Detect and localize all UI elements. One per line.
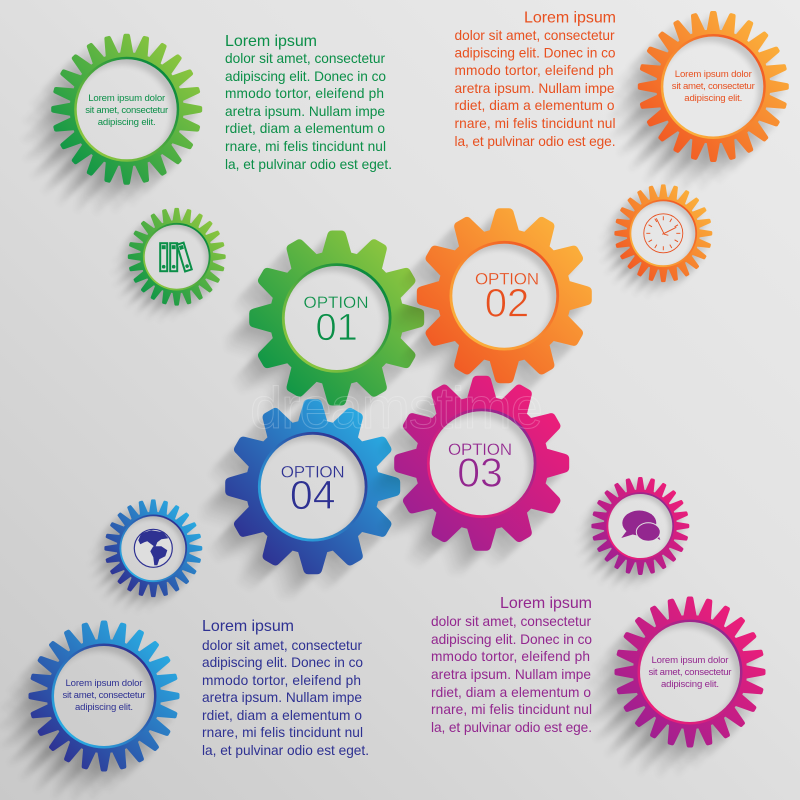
- gear: orange text badge: sit amet, consectetur: [672, 81, 756, 92]
- text block: blue: rnare, mi felis tincidunt nul: [202, 725, 363, 740]
- gear: magenta text badge: Lorem ipsum dolor: [652, 655, 729, 666]
- gear with icon: chat: [580, 477, 690, 586]
- text block: green: rdiet, diam a elementum o: [225, 121, 385, 136]
- text block: blue: aretra ipsum. Nullam impe: [202, 690, 362, 705]
- gear: blue text badge: Lorem ipsum dolor: [66, 678, 143, 689]
- text block: green: mmodo tortor, eleifend ph: [225, 86, 384, 101]
- text block: magenta: mmodo tortor, eleifend ph: [431, 649, 590, 664]
- gear: option 03 magenta: 03: [457, 450, 503, 496]
- gear with icon: binders: [116, 208, 226, 317]
- gear: magenta text badge: adipiscing elit.: [661, 679, 719, 690]
- text block: orange: rdiet, diam a elementum o: [454, 98, 615, 113]
- gear: option 04 blue: 04: [290, 472, 336, 518]
- text block: orange: rnare, mi felis tincidunt nul: [454, 116, 616, 131]
- gear: option 03 magenta: [367, 373, 572, 578]
- icon: clock: [644, 214, 683, 253]
- text block: blue: adipiscing elit. Donec in co: [202, 655, 363, 670]
- text block: blue: rdiet, diam a elementum o: [202, 708, 362, 723]
- watermark: dreamstime: [250, 376, 543, 441]
- text block: magenta: la, et pulvinar odio est ege.: [431, 720, 592, 735]
- text block: green: adipiscing elit. Donec in co: [225, 69, 386, 84]
- icon: speech bubbles: [621, 510, 660, 541]
- gear: option 03 magenta: OPTION: [448, 440, 512, 459]
- text block: magenta: adipiscing elit. Donec in co: [431, 632, 592, 647]
- gear: orange text badge: Lorem ipsum dolor: [675, 69, 753, 80]
- gear: orange text badge: adipiscing elit.: [684, 93, 742, 104]
- text block: orange: adipiscing elit. Donec in co: [454, 46, 616, 60]
- text block: magenta: Lorem ipsum: [500, 595, 592, 612]
- gear with icon: globe: [94, 499, 202, 608]
- gear: blue text badge: adipiscing elit.: [75, 702, 133, 713]
- icon: globe: [134, 529, 172, 567]
- text block: blue: mmodo tortor, eleifend ph: [202, 673, 361, 688]
- text block: orange: dolor sit amet, consectetur: [454, 28, 615, 43]
- gear: option 02 orange: 02: [485, 282, 529, 326]
- text block: blue: [202, 618, 369, 758]
- text block: magenta: rnare, mi felis tincidunt nul: [431, 702, 592, 717]
- icon: binders: [160, 243, 192, 271]
- gear: option 02 orange: OPTION: [475, 270, 539, 288]
- gear: green text badge: [26, 34, 202, 210]
- text block: green: rnare, mi felis tincidunt nul: [225, 139, 386, 154]
- text block: orange: aretra ipsum. Nullam impe: [454, 81, 614, 96]
- gear: option 02 orange: [396, 208, 592, 396]
- gear: option 01 green: 01: [316, 307, 358, 349]
- gear: option 04 blue: [198, 397, 403, 602]
- text block: blue: Lorem ipsum: [202, 618, 294, 635]
- gear: green text badge: sit amet, consectetur: [85, 105, 169, 116]
- gear: green text badge: adipiscing elit.: [98, 117, 156, 128]
- gear: magenta text badge: sit amet, consectetur: [648, 667, 732, 678]
- text block: magenta: rdiet, diam a elementum o: [431, 685, 591, 700]
- text block: orange: la, et pulvinar odio est ege.: [454, 134, 616, 149]
- text block: orange: Lorem ipsum: [524, 10, 616, 27]
- text block: blue: la, et pulvinar odio est eget.: [202, 743, 369, 758]
- gear: blue text badge: sit amet, consectetur: [62, 690, 146, 701]
- gear: option 01 green: OPTION: [304, 293, 368, 312]
- text block: blue: dolor sit amet, consectetur: [202, 638, 362, 653]
- text block: green: la, et pulvinar odio est eget.: [225, 157, 392, 172]
- text block: green: Lorem ipsum: [225, 33, 317, 50]
- text block: green: aretra ipsum. Nullam impe: [225, 104, 385, 119]
- gear: magenta text badge: [590, 596, 766, 772]
- text block: magenta: [431, 595, 592, 735]
- gear: option 04 blue: OPTION: [281, 463, 345, 482]
- text block: orange: mmodo tortor, eleifend ph: [454, 63, 614, 78]
- gear: green text badge: Lorem ipsum dolor: [88, 93, 166, 104]
- gear: option 01 green: [228, 230, 424, 420]
- text block: green: [225, 33, 392, 172]
- gear with icon: clock: [603, 184, 712, 294]
- gear: blue text badge: [0, 618, 182, 800]
- text block: magenta: aretra ipsum. Nullam impe: [431, 667, 591, 682]
- gear: orange text badge: [613, 11, 789, 186]
- text block: orange: [454, 10, 616, 149]
- text block: green: dolor sit amet, consectetur: [225, 51, 385, 66]
- text block: magenta: dolor sit amet, consectetur: [431, 614, 591, 629]
